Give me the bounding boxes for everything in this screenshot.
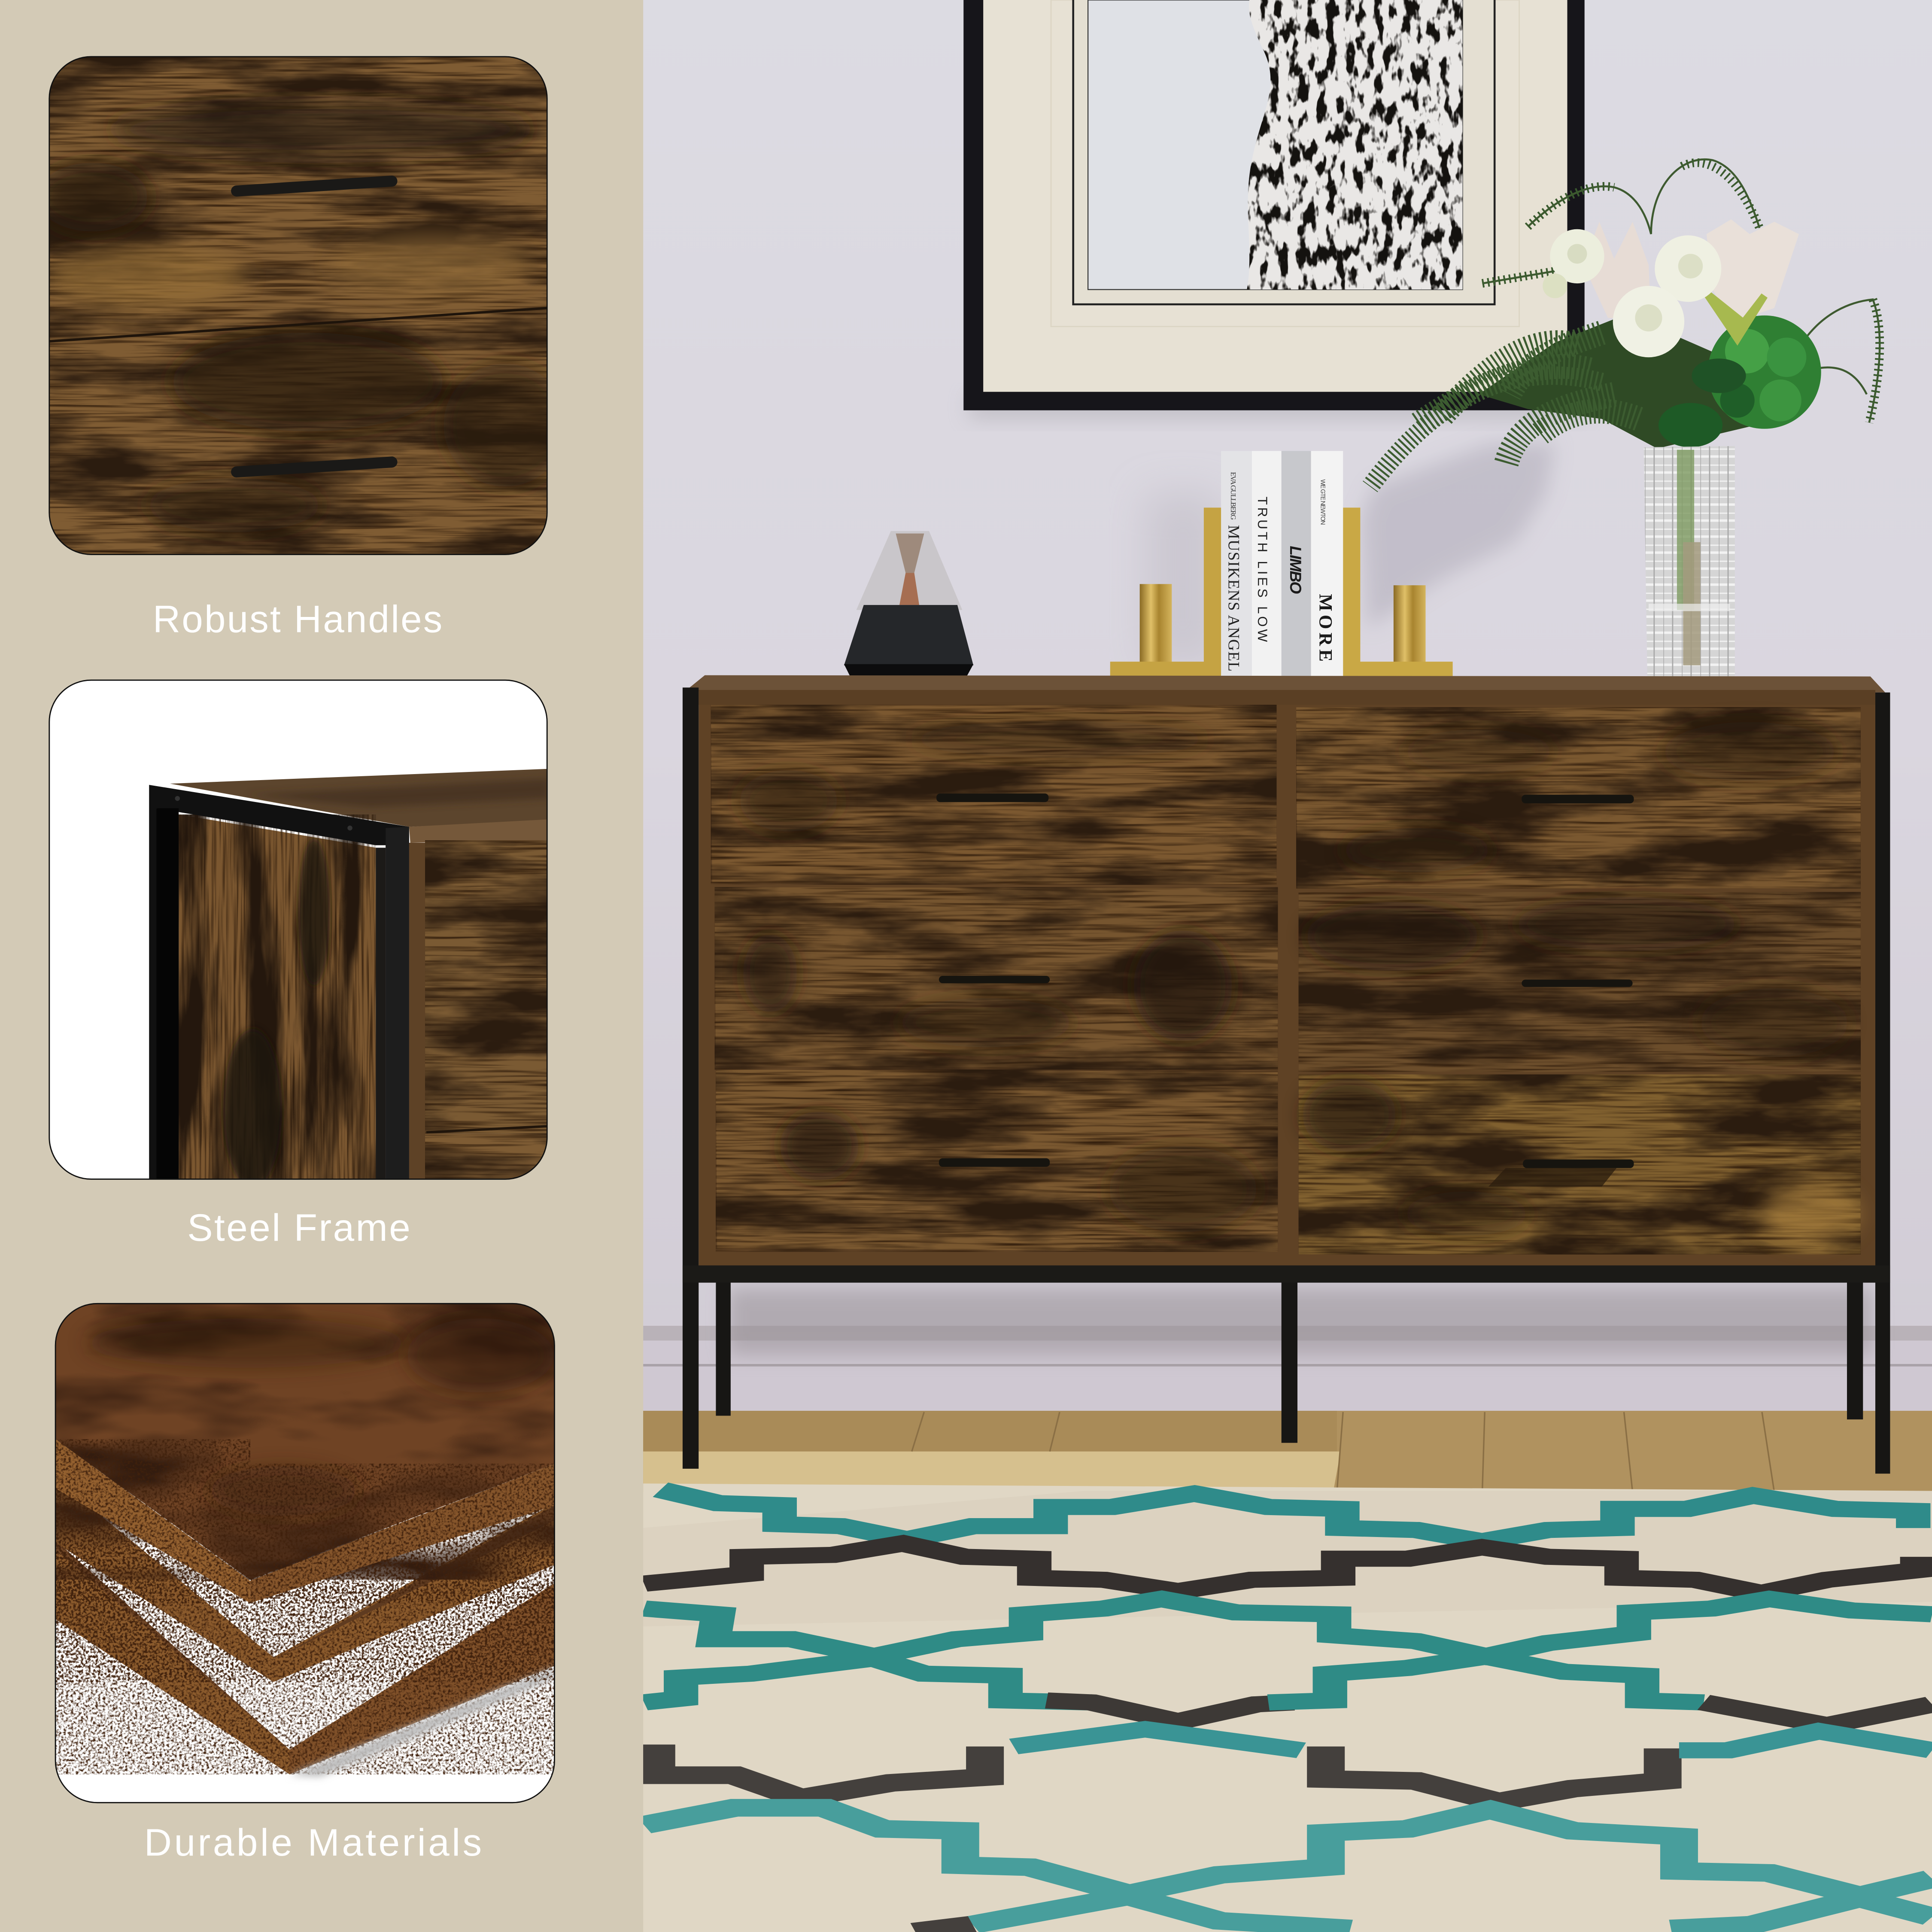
- drawer: bottom left: [716, 1069, 1278, 1252]
- icon: steel frame bars: [149, 785, 409, 1179]
- book: More: MORE: [1315, 594, 1336, 662]
- book: Musikens Angel: [1221, 451, 1252, 687]
- protea flowers: [1583, 222, 1651, 320]
- thin twigs: [1482, 159, 1880, 422]
- panel: room scene: [643, 0, 1932, 1932]
- floor: [643, 1411, 1932, 1492]
- wall shadow of bouquet and books: [1146, 444, 1555, 665]
- book: Limbo: LIMBO: [1287, 546, 1305, 594]
- heading: Durable Materials: Durable Materials: [144, 1821, 482, 1864]
- leopard artwork: [1242, 0, 1464, 291]
- aroma diffuser: [844, 531, 973, 681]
- second board: [55, 1479, 554, 1682]
- back and centre legs: [716, 1282, 1863, 1443]
- cabinet body: [699, 690, 1875, 1267]
- panel: durable materials close-up: [55, 1303, 554, 1803]
- drawer: middle right: [1299, 892, 1861, 1072]
- icon: lower drawer handle: [237, 462, 392, 472]
- book: More: [1311, 451, 1343, 687]
- baseboard: [643, 1288, 1932, 1412]
- rug: [643, 1483, 1932, 1932]
- gold cylinder left: [1140, 584, 1172, 664]
- drawer: top left: [711, 705, 1276, 885]
- wall: [643, 0, 1932, 1331]
- heading: Robust Handles: Robust Handles: [153, 597, 442, 640]
- handle: [936, 793, 1048, 802]
- front left leg: [683, 687, 699, 1469]
- fern fronds: [1370, 333, 1639, 487]
- front right leg: [1875, 693, 1890, 1473]
- drawer: top right: [1296, 707, 1861, 888]
- drawer: bottom right: [1299, 1075, 1861, 1255]
- panel: steel frame close-up: [49, 680, 548, 1189]
- lower steel rail: [683, 1265, 1890, 1283]
- handle: [939, 976, 1050, 983]
- bookend left: [1110, 507, 1222, 684]
- book: Limbo: [1282, 451, 1311, 687]
- dresser: [683, 675, 1890, 1473]
- stack of books: [1221, 451, 1343, 687]
- book: Musikens Angel: MUSIKENS ANGEL: [1224, 525, 1242, 671]
- bookend right: [1343, 507, 1453, 685]
- large dark leaves: [1659, 403, 1722, 447]
- panel: robust handles close-up: [37, 57, 567, 554]
- book: Truth Lies Low: TRUTH LIES LOW: [1255, 497, 1270, 642]
- first board top surface and edges: [55, 1303, 554, 1580]
- handle: [1523, 1160, 1634, 1168]
- book: Truth Lies Low: [1252, 451, 1282, 687]
- book: More: WE GTE NEWTON: [1319, 479, 1326, 525]
- glass vase: [1643, 446, 1735, 686]
- bouquet: [1370, 159, 1880, 487]
- gold cylinder right: [1394, 585, 1425, 667]
- green foliage mass: [1479, 314, 1756, 449]
- heading: Steel Frame: Steel Frame: [187, 1206, 410, 1249]
- dresser top surface: [685, 675, 1885, 693]
- book: Musikens Angel: EVA GULLBERG: [1229, 472, 1237, 520]
- hydrangea: [1708, 316, 1821, 429]
- framed leopard print: [963, 0, 1585, 419]
- drawer: middle left: [715, 887, 1278, 1069]
- third board: [55, 1540, 554, 1774]
- handle: [1522, 795, 1634, 803]
- icon: upper drawer handle: [237, 181, 392, 191]
- left beige panel background: [0, 0, 644, 1932]
- handle: [939, 1158, 1050, 1167]
- peony flowers: [1550, 229, 1604, 283]
- handle: [1522, 980, 1633, 987]
